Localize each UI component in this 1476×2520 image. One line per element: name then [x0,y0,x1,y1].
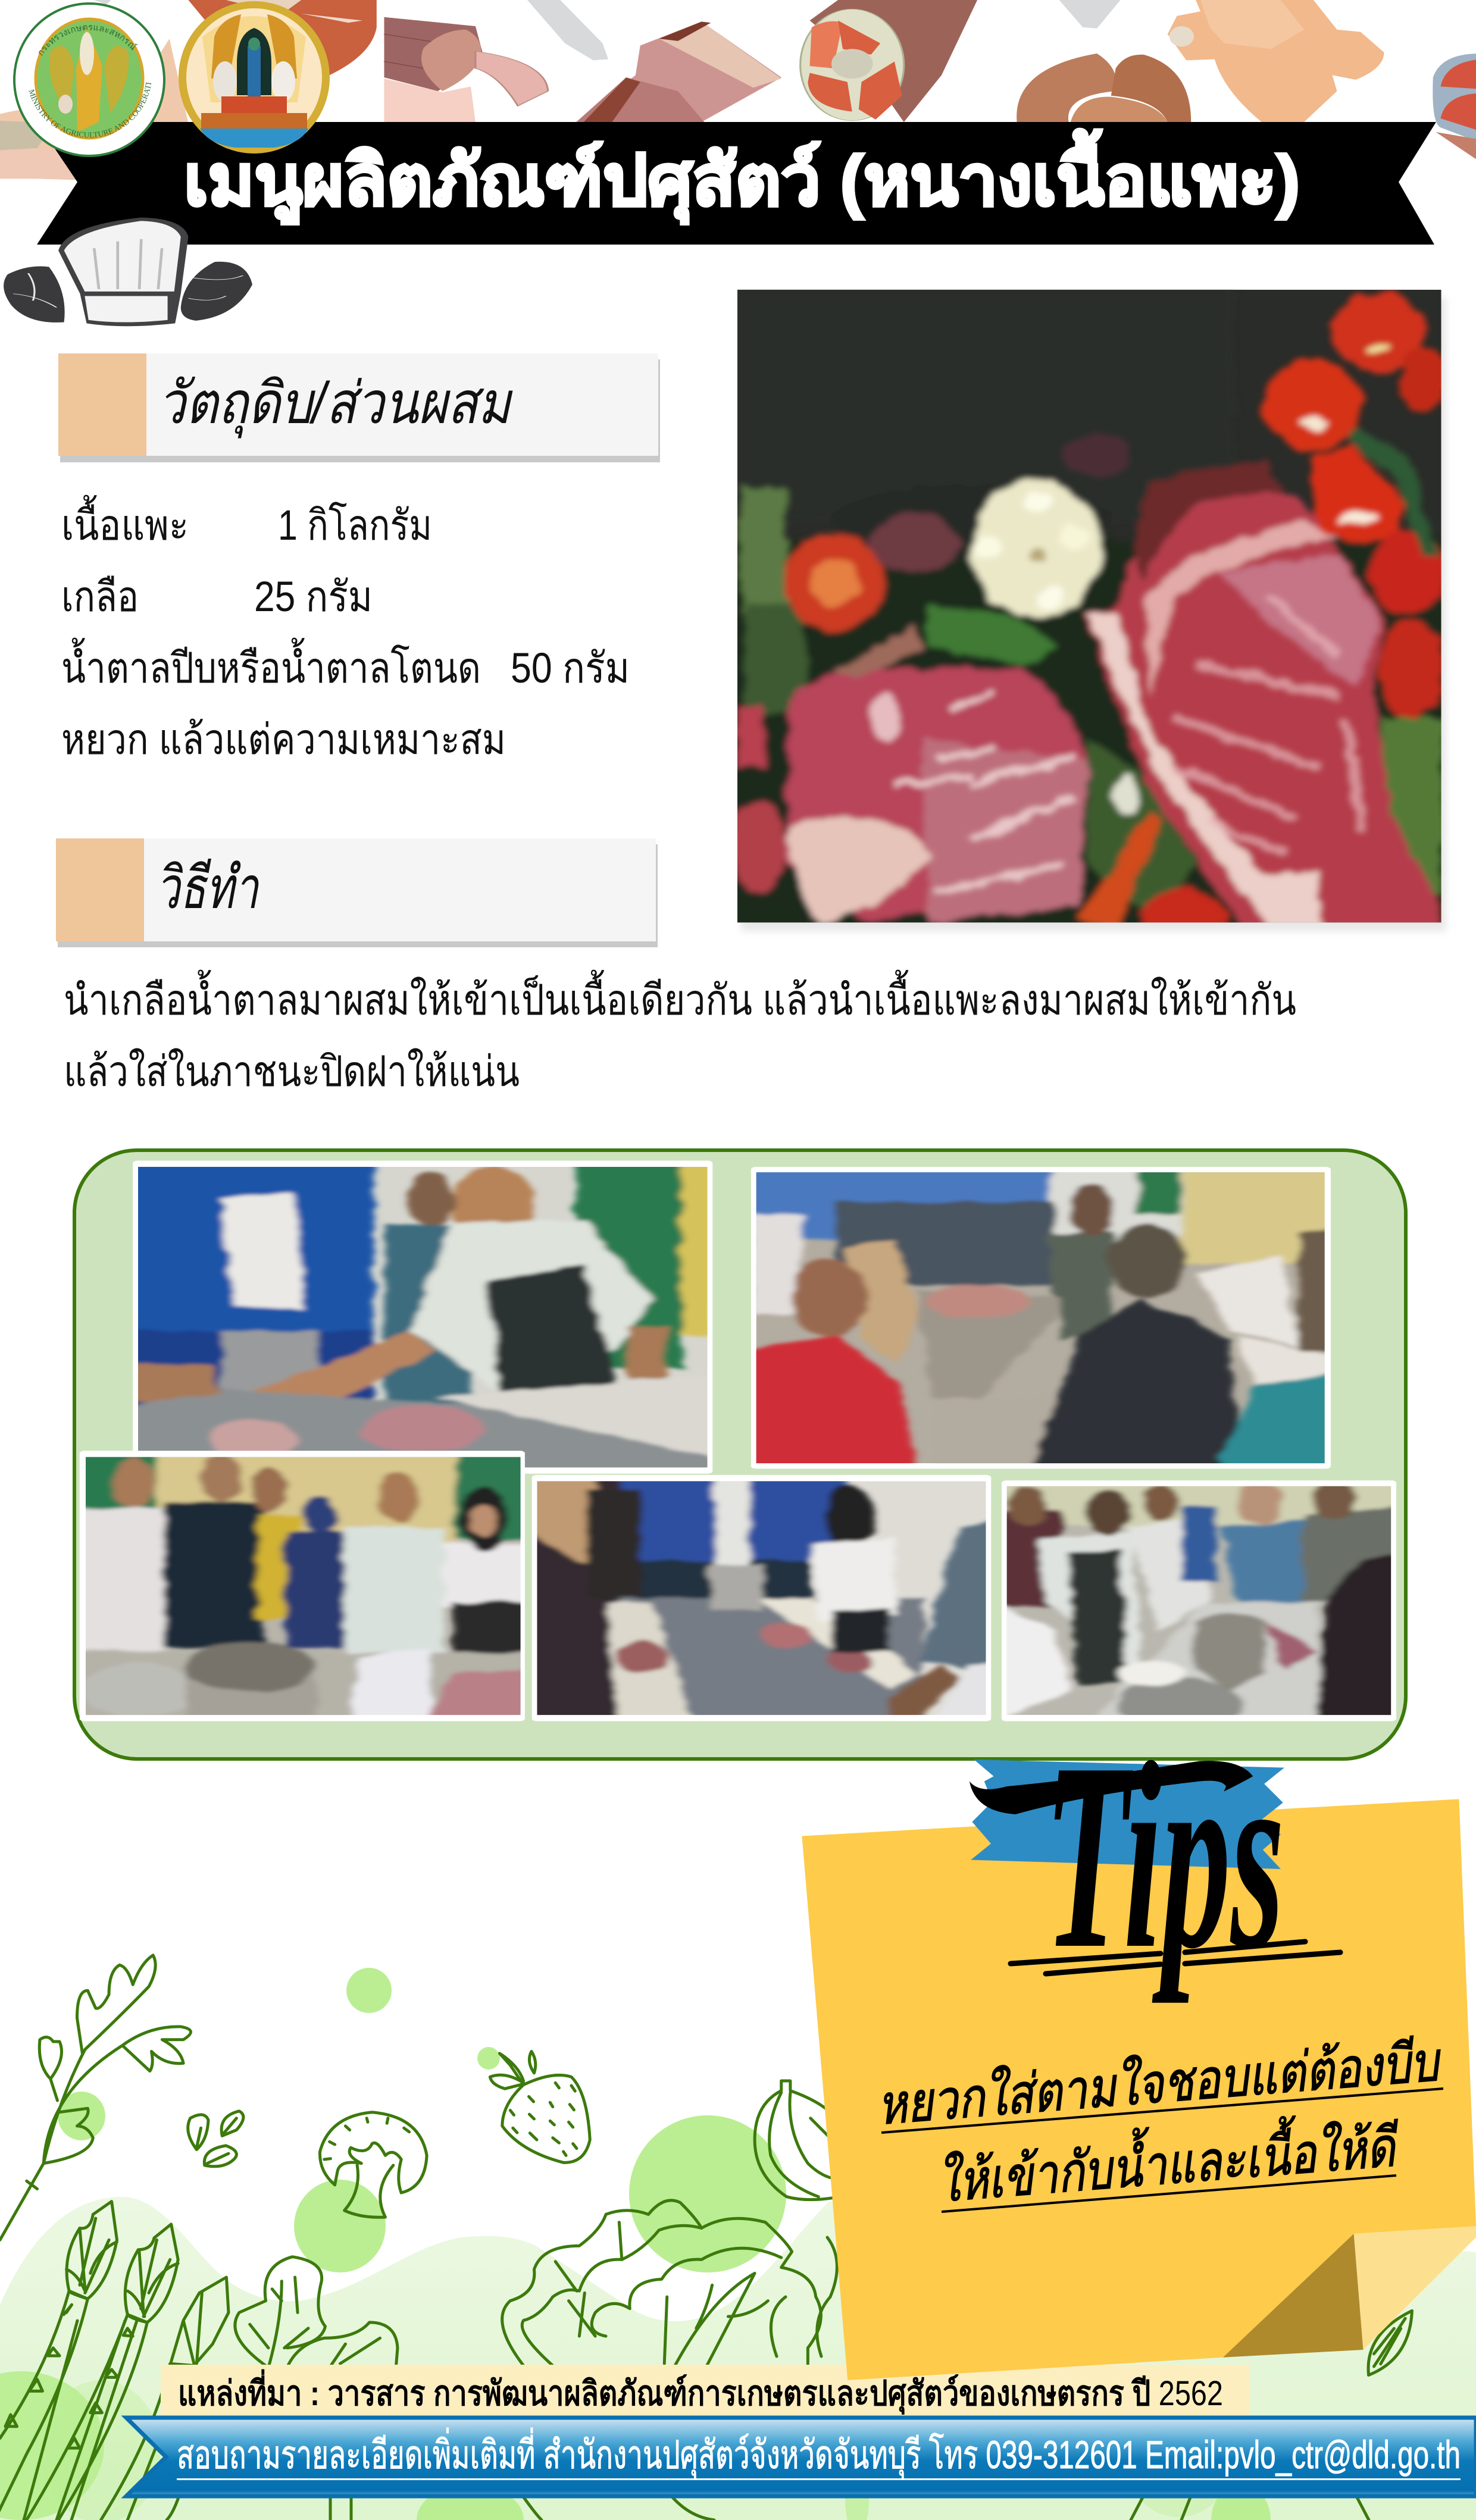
tips underlines [1011,1942,1340,1974]
icon: lettuce [502,2200,821,2366]
chicken [1168,0,1384,122]
method text [64,969,1296,1095]
tips lettering [1011,1708,1340,2004]
icon: left steak [4,267,65,323]
ingredient list: น้ำตาลปีบหรือน้ำตาลโตนด [61,637,481,692]
right meat [1433,54,1476,159]
title banner [37,122,1436,245]
photo: instructor demonstrating at the pot [994,1477,1404,1730]
chef hat with meats [4,217,252,326]
leg of meat [800,0,977,122]
ham [576,21,781,122]
folded corner [1354,2226,1476,2350]
icon: right steak [181,262,252,321]
logo: Department of Livestock Development [179,1,330,154]
photo: raw meat with tomatoes and garlic [737,289,1447,932]
method text: แล้วใส่ในภาชนะปิดฝาให้แน่น [64,1048,520,1095]
icon: mushroom [320,2112,427,2217]
photo: group around the table [740,1164,1339,1473]
blue tape [971,1760,1284,1869]
ingredient list: 25 กรัม [254,574,373,621]
tips sticky note [802,1760,1476,2380]
sausage with slices [384,17,548,122]
icon: spinach leaves [235,2257,398,2368]
fold shadow [1223,2234,1363,2358]
ingredient list: เนื้อแพะ [61,494,189,549]
note body [802,1799,1476,2380]
ingredient list: 1 กิโลกรัม [278,501,432,549]
vegetable line drawings [0,1955,840,2520]
section heading: method [56,838,658,947]
tips T swash [970,1761,1253,1814]
photo: instructor at the meat saw [121,1160,723,1477]
header meat illustrations [0,0,1476,180]
icon: small leaves [188,2111,243,2167]
ingredient list: 50 กรัม [511,645,630,692]
icon: chef hat [58,217,188,326]
photo: participants cutting meat [523,1473,998,1723]
icon: strawberry [490,2052,590,2162]
background: green hills [0,2197,1476,2520]
photo: participants posing [68,1448,536,1723]
icon: asparagus group [0,2202,229,2520]
source citation strip [161,2365,1250,2416]
contact ribbon [126,2418,1476,2496]
background: green blobs [0,1968,1271,2520]
tips message [875,2031,1444,2214]
logo: Ministry of Agriculture and Cooperatives: กระทรวงเกษตรและสหกรณ์ [39,25,138,56]
method text: นำเกลือน้ำตาลมาผสมให้เข้าเป็นเนื้อเดียวกัน แล้วนำเนื้อแพะลงมาผสมให้เข้ากัน [64,969,1296,1024]
icon: onion [755,2081,840,2200]
section heading: ingredients [58,353,660,462]
title text: เมนูผลิตภัณฑ์ปศุสัตว์ (หนางเนื้อแพะ) [184,129,1300,224]
tip leaf [1368,2311,1412,2375]
left meat cut [0,0,377,180]
section heading: method: วิธีทำ [156,855,259,921]
sausage links [1017,54,1191,122]
grey knives [94,0,1121,60]
source citation strip: แหล่งที่มา : วารสาร การพัฒนาผลิตภัณฑ์การเกษตรและปศุสัตว์ของเกษตรกร ปี 2562 [178,2369,1223,2415]
ingredient list [61,494,630,763]
panel: workshop photo collage [68,1150,1406,1759]
lower vegetable strokes [24,2237,1369,2520]
section heading: ingredients: วัตถุดิบ/ส่วนผสม [158,370,513,439]
ingredient list: หยวก แล้วแต่ความเหมาะสม [61,716,506,763]
icon: herb sprig [0,1955,190,2240]
ingredient list: เกลือ [61,574,139,621]
